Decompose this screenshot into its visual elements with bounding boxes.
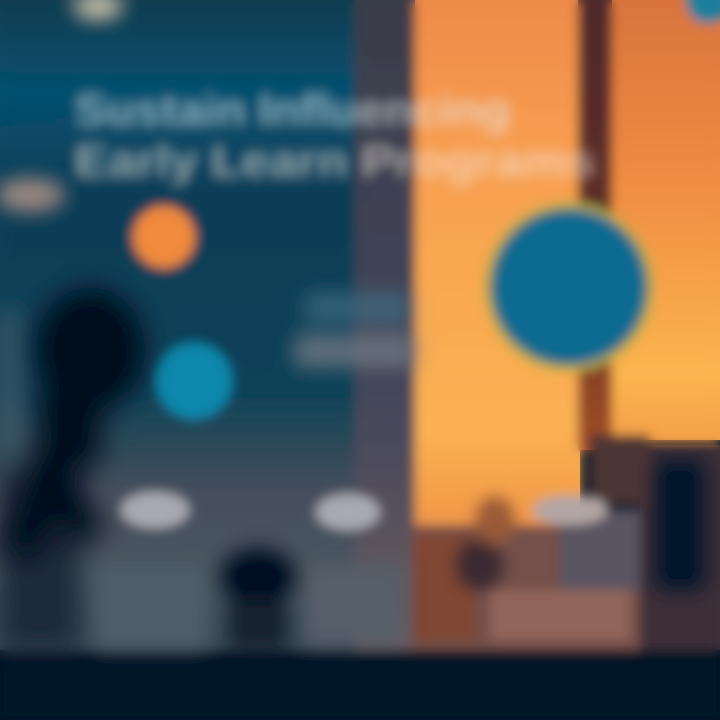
left edge label glow [0,179,64,211]
silhouette figure [0,288,145,560]
dark icon blob: right [456,496,515,591]
labels row [121,492,608,530]
circle: large blue with yellow rim [484,202,654,372]
text block: centre caption [295,292,415,367]
title [75,86,595,186]
title: Sustain Influencing [75,86,510,135]
card: centre [305,565,405,645]
circle: cyan [156,343,232,419]
circle: orange [133,206,195,268]
top left glow [74,0,122,19]
dark block: right [655,460,705,590]
title: Early Learn Programs [75,137,595,186]
left lower dark band [0,470,80,650]
left edge grey band [0,310,22,450]
card: left [95,565,207,650]
dark icon blob: centre [220,548,296,650]
circle: top right teal [686,0,720,24]
